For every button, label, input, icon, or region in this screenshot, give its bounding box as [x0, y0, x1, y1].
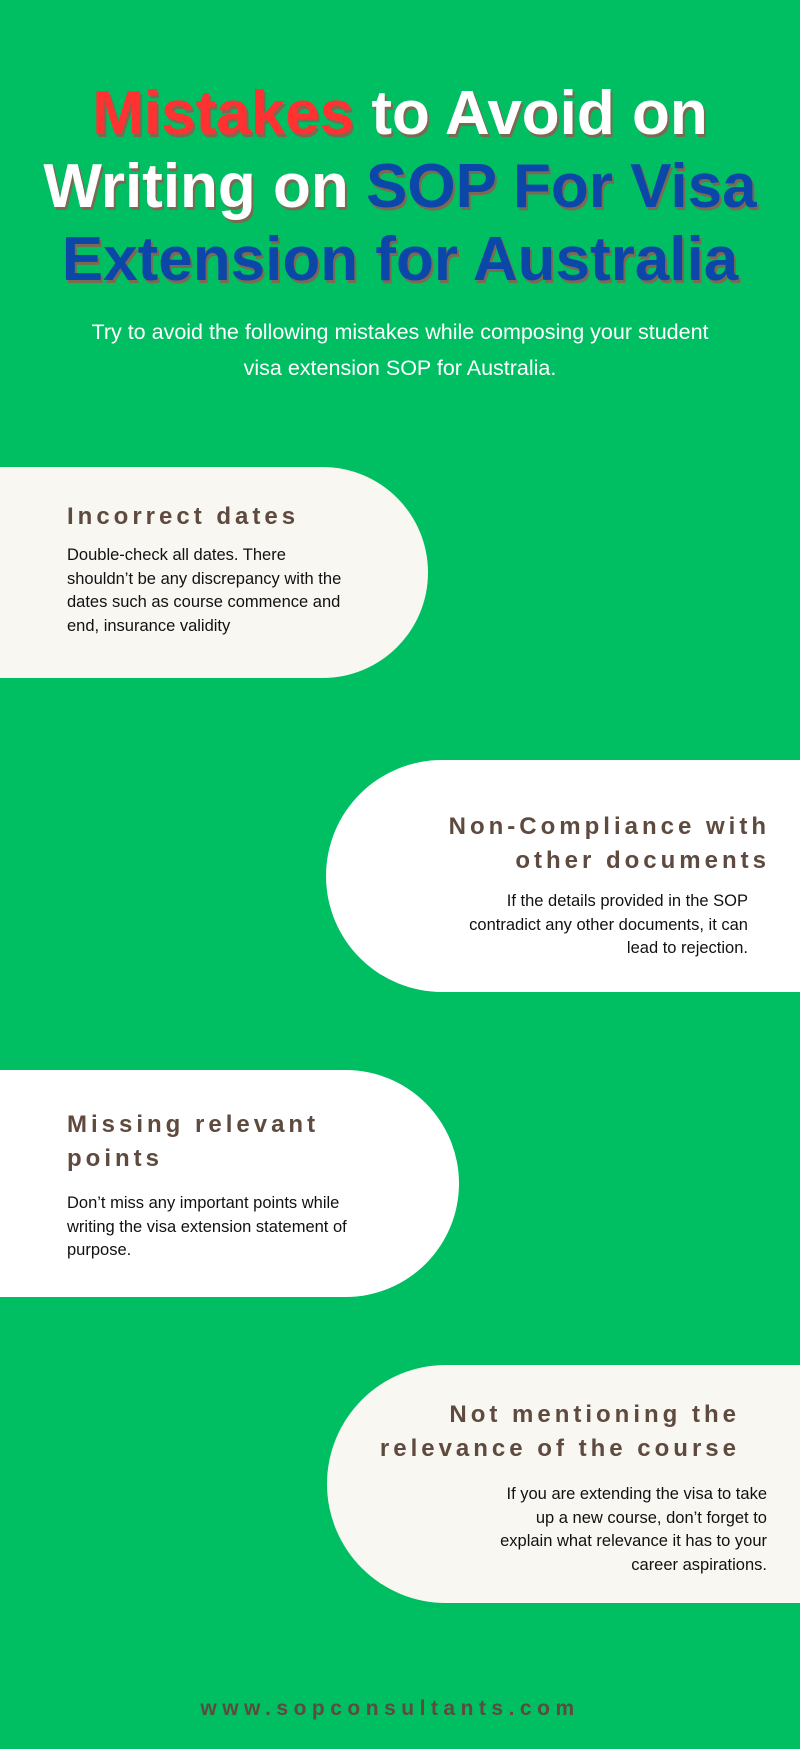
card: non-compliance [326, 760, 800, 992]
title [43, 79, 759, 294]
heading: Not mentioning the relevance of the course [380, 1401, 740, 1462]
body text: Don’t miss any important points while writing the visa extension statement of purpose. [67, 1194, 347, 1259]
body text: Double-check all dates. There shouldn’t be any discrepancy with the dates such as course commence and end, insurance validity [67, 546, 341, 634]
subtitle: Try to avoid the following mistakes while composing your student visa extension SOP for Australia. [91, 320, 709, 380]
body text: If the details provided in the SOP contradict any other documents, it can lead to rejection. [469, 892, 748, 957]
body text: If you are extending the visa to take up a new course, don’t forget to explain what relevance it has to your career aspirations. [500, 1485, 767, 1574]
title: Extension for Australia [62, 225, 738, 294]
title: Writing on SOP For Visa [43, 152, 757, 221]
title: Mistakes to Avoid on [92, 79, 708, 148]
card: incorrect dates [0, 467, 428, 678]
heading: Incorrect dates [67, 503, 299, 530]
footer url: www.sopconsultants.com [200, 1697, 580, 1720]
heading: Missing relevant points [67, 1111, 319, 1172]
card: relevance [327, 1365, 800, 1603]
heading: Non-Compliance with other documents [449, 813, 770, 874]
card: missing points [0, 1070, 459, 1297]
